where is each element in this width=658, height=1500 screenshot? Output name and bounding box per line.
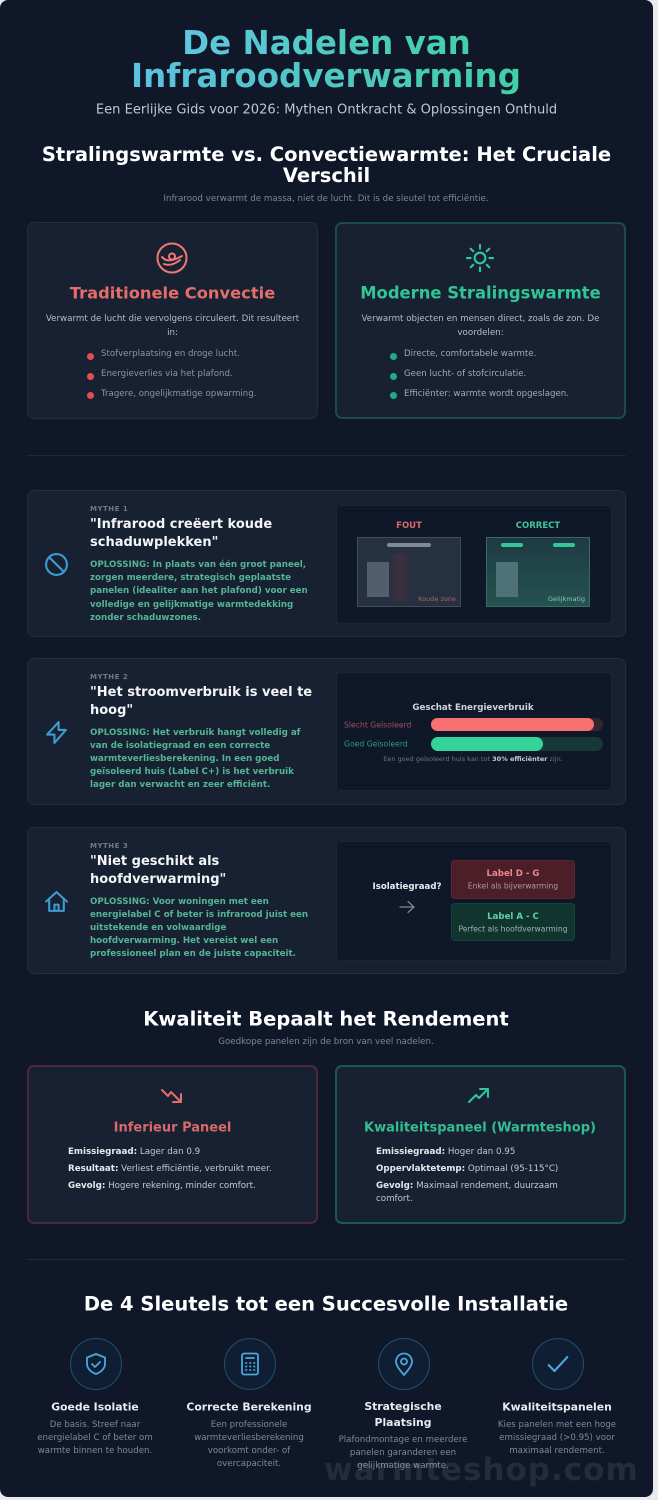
icon: lightning bolt: [46, 721, 67, 744]
spec list: [376, 1147, 558, 1204]
solution text: OPLOSSING: Voor woningen met een: [90, 897, 269, 907]
heading: Kwaliteitspaneel (Warmteshop): [364, 1120, 596, 1136]
myth statement: "Infrarood creëert koude: [90, 516, 272, 532]
solution text: geïsoleerd huis (Label C+) is het verbruik: [90, 767, 294, 777]
key: goede isolatie: [37, 1338, 153, 1456]
list: Directe, comfortabele warmte.: [404, 349, 536, 359]
panel: mythe 3: [27, 827, 626, 974]
spec list: Resultaat: Verliest efficiëntie, verbruikt meer.: [68, 1164, 272, 1174]
solution text: OPLOSSING: In plaats van één groot paneel,: [90, 560, 306, 570]
bar: goed: [431, 737, 603, 751]
panel: moderne stralingswarmte: [335, 222, 626, 419]
box: label d-g: [451, 860, 575, 899]
question: Isolatiegraad?: [373, 882, 441, 892]
description: [46, 314, 299, 338]
solution text: uitstekende en volwaardige: [90, 923, 226, 933]
key text: gelijkmatige warmte.: [357, 1461, 449, 1471]
key text: [194, 1420, 304, 1469]
solution text: hoofdverwarming. Het vereist wel een: [90, 936, 278, 946]
key title: Strategische: [364, 1400, 442, 1413]
title: De Nadelen van: [182, 24, 471, 62]
solution text: panelen (idealiter aan het plafond) voor een: [90, 586, 308, 596]
key text: [37, 1420, 153, 1456]
icon: trending up: [468, 1088, 489, 1103]
solution text: energielabel C of beter is infrarood juist een: [90, 910, 308, 920]
panel: mythe 2: [27, 658, 626, 805]
note: Een goed geïsoleerd huis kan tot 30% efficiënter zijn.: [383, 755, 563, 763]
heading: stralingswarmte vs convectiewarmte: Verschil: [283, 164, 370, 187]
spec list: Gevolg: Maximaal rendement, duurzaam: [376, 1181, 558, 1191]
list: Efficiënter: warmte wordt opgeslagen.: [404, 389, 569, 399]
key title: Goede Isolatie: [51, 1400, 139, 1414]
subtitle: Een Eerlijke Gids voor 2026: Mythen Ontkracht & Oplossingen Onthuld: [96, 102, 557, 118]
spec list: Gevolg: Hogere rekening, minder comfort.: [68, 1181, 256, 1191]
list: Tragere, ongelijkmatige opwarming.: [101, 389, 256, 399]
myth statement: schaduwplekken": [90, 534, 218, 550]
icon: shield: [70, 1338, 122, 1390]
key text: Een professionele: [211, 1420, 287, 1430]
spec list: [68, 1147, 272, 1191]
section intro: Infrarood verwarmt de massa, niet de lucht. Dit is de sleutel tot efficiëntie.: [163, 194, 489, 204]
icon: prohibited: [45, 553, 68, 576]
room: wrong: [357, 537, 461, 607]
heading: stralingswarmte vs convectiewarmte: [42, 143, 611, 187]
title: Infraroodverwarming: [131, 57, 521, 95]
row label: Goed Geïsoleerd: [344, 740, 408, 748]
solution text: zorgen meerdere, strategisch geplaatste: [90, 573, 291, 583]
panel: kwaliteitspaneel: [335, 1065, 626, 1224]
key text: De basis. Streef naar: [50, 1420, 140, 1430]
myth statement: [90, 854, 226, 886]
key text: overcapaciteit.: [217, 1459, 281, 1469]
key text: warmteverliesberekening: [194, 1433, 304, 1443]
solution text: volledige en gelijkmatige warmtedekking: [90, 600, 293, 610]
myth label: MYTHE 1: [90, 505, 128, 513]
section intro: Goedkope panelen zijn de bron van veel nadelen.: [218, 1037, 434, 1047]
heading: kwaliteit: Kwaliteit Bepaalt het Rendement: [143, 1008, 509, 1030]
solution text: zonder schaduwzones.: [90, 613, 201, 623]
label: correct: CORRECT: [516, 521, 560, 531]
bar: slecht: [431, 718, 603, 731]
key title: Kwaliteitspanelen: [502, 1400, 612, 1414]
key text: warmte binnen te houden.: [38, 1446, 152, 1456]
solution text: professioneel plan en de juiste capaciteit.: [90, 949, 296, 959]
box: label d-g: Label D - G: [487, 869, 539, 879]
spec list: Oppervlaktetemp: Optimaal (95-115°C): [376, 1164, 558, 1174]
spec list: Emissiegraad: Hoger dan 0.95: [376, 1147, 515, 1157]
room: correct: Gelijkmatig: [548, 595, 585, 603]
key: kwaliteitspanelen: [498, 1338, 616, 1456]
key text: emissiegraad (>0.95) voor: [499, 1433, 615, 1443]
heading: Moderne Stralingswarmte: [360, 284, 601, 302]
heading: Inferieur Paneel: [114, 1120, 231, 1136]
description: Verwarmt de lucht die vervolgens circuleert. Dit resulteert: [46, 314, 299, 324]
myth statement: "Niet geschikt als: [90, 854, 219, 868]
key title: Plaatsing: [375, 1416, 431, 1429]
icon: trending down: [161, 1089, 182, 1103]
key text: energielabel C of beter om: [37, 1433, 153, 1443]
solution text: OPLOSSING: Het verbruik hangt volledig af: [90, 728, 300, 738]
box: label a-c: [451, 903, 575, 941]
solution text: lager dan verwacht en zeer efficiënt.: [90, 780, 270, 790]
room: correct: [486, 537, 590, 607]
watermark: warmteshop.com: [324, 1452, 639, 1488]
solution text: [90, 560, 308, 623]
myth label: MYTHE 3: [90, 842, 128, 850]
description: [362, 314, 599, 338]
heading: 4 sleutels: De 4 Sleutels tot een Succesvolle Installatie: [84, 1292, 568, 1316]
label: fout: FOUT: [396, 521, 422, 531]
spec list: comfort.: [376, 1194, 413, 1204]
myth label: MYTHE 2: [90, 673, 128, 681]
myth statement: [90, 684, 312, 718]
chart: geschat energieverbruik: [336, 672, 612, 791]
icon: calculator: [224, 1338, 276, 1390]
key title: Correcte Berekening: [186, 1400, 312, 1414]
list: Energieverlies via het plafond.: [101, 369, 233, 379]
list: Stofverplaatsing en droge lucht.: [101, 349, 240, 359]
key text: maximaal rendement.: [509, 1446, 605, 1456]
icon: house: [45, 891, 68, 912]
myth statement: "Het stroomverbruik is veel te: [90, 684, 312, 700]
key text: Plafondmontage en meerdere: [339, 1435, 467, 1445]
box: label a-c: Perfect als hoofdverwarming: [458, 924, 568, 934]
key text: [339, 1435, 467, 1471]
flow: isolatiegraad: [336, 841, 612, 961]
description: Verwarmt objecten en mensen direct, zoals de zon. De: [362, 314, 599, 324]
icon: convection: [156, 242, 188, 274]
myth statement: hoog": [90, 702, 133, 718]
icon: sun: [466, 244, 494, 272]
key: correcte berekening: [186, 1338, 312, 1469]
row label: Slecht Geïsoleerd: [344, 720, 411, 730]
spec list: Emissiegraad: Lager dan 0.9: [68, 1147, 200, 1157]
panel: mythe 1: [27, 490, 626, 637]
diagram: panel placement: [336, 505, 612, 624]
room: wrong: Koude zone: [418, 595, 456, 603]
key text: [498, 1420, 616, 1456]
key title: [364, 1400, 442, 1429]
arrow: [400, 900, 415, 914]
list: [390, 349, 569, 399]
description: in:: [167, 328, 178, 338]
key text: panelen garanderen een: [350, 1448, 456, 1458]
box: label d-g: Enkel als bijverwarming: [468, 882, 558, 890]
solution text: [90, 897, 308, 959]
myth statement: [90, 516, 272, 550]
heading: Traditionele Convectie: [70, 284, 275, 302]
chart title: Geschat Energieverbruik: [412, 703, 534, 713]
list: Geen lucht- of stofcirculatie.: [404, 369, 526, 379]
myth statement: hoofdverwarming": [90, 872, 226, 886]
box: label a-c: Label A - C: [487, 912, 539, 922]
key text: voorkomt onder- of: [208, 1446, 290, 1456]
list: [87, 349, 256, 399]
description: voordelen:: [457, 328, 504, 338]
solution text: [90, 728, 300, 790]
icon: check: [532, 1338, 584, 1390]
heading: stralingswarmte vs convectiewarmte: Stralingswarmte vs. Convectiewarmte: Het Cruciale: [42, 143, 611, 166]
key: strategische plaatsing: [339, 1338, 467, 1471]
key text: Kies panelen met een hoge: [498, 1420, 616, 1430]
panel: inferieur paneel: [27, 1065, 318, 1224]
icon: map pin: [378, 1338, 430, 1390]
solution text: van de isolatiegraad en een correcte: [90, 741, 270, 751]
panel: traditionele convectie: [27, 222, 318, 419]
title: [131, 24, 521, 95]
solution text: warmteverliesberekening. In een goed: [90, 754, 279, 764]
